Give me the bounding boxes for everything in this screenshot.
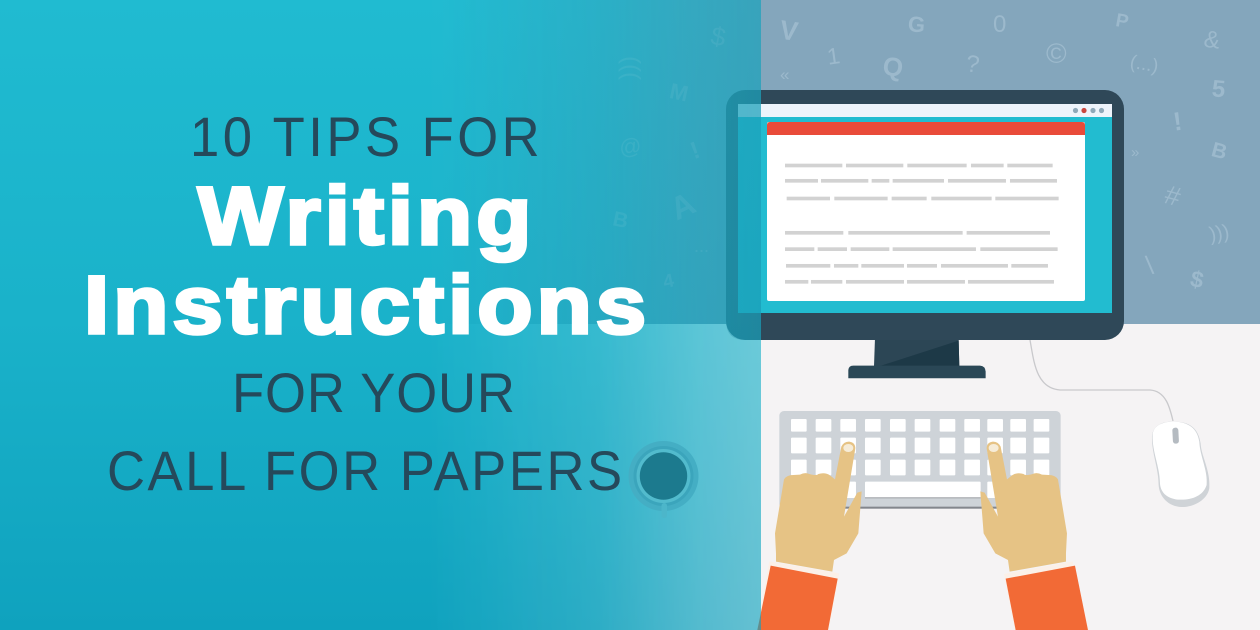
scattered characters on the wall: © bbox=[1046, 38, 1067, 69]
scattered characters on the wall bbox=[778, 10, 1231, 293]
left hand bbox=[775, 442, 862, 572]
scattered characters on the wall: « bbox=[780, 65, 789, 84]
right sleeve bbox=[1004, 561, 1089, 630]
faint characters on teal panel: M bbox=[668, 78, 691, 106]
scattered characters on the wall: \ bbox=[1144, 250, 1156, 280]
title line: for your: FOR YOUR bbox=[232, 362, 515, 424]
left sleeve bbox=[757, 561, 839, 630]
background: desk bbox=[0, 324, 1260, 630]
scattered characters on the wall: (...) bbox=[1128, 52, 1160, 77]
window title bar bbox=[738, 104, 1112, 117]
cup handle bbox=[662, 503, 667, 518]
scattered characters on the wall: » bbox=[1131, 144, 1139, 161]
scattered characters on the wall: V bbox=[778, 15, 800, 47]
title line: call for papers: CALL FOR PAPERS bbox=[107, 440, 622, 502]
screen bbox=[738, 104, 1112, 313]
scattered characters on the wall: $ bbox=[1188, 265, 1206, 293]
scattered characters on the wall: ? bbox=[964, 50, 981, 79]
document page bbox=[767, 122, 1085, 301]
mouse bbox=[1152, 422, 1209, 507]
darker tint on the upper teal panel bbox=[440, 0, 761, 340]
mouse cable bbox=[1030, 340, 1173, 421]
teal overlay panel bbox=[0, 0, 761, 630]
coffee cup bbox=[628, 441, 698, 518]
document text lines bbox=[785, 164, 1059, 284]
faint characters on teal panel bbox=[611, 20, 729, 293]
scattered characters on the wall: 5 bbox=[1211, 75, 1226, 103]
cup rim bbox=[636, 449, 690, 503]
scattered characters on the wall: G bbox=[907, 11, 926, 38]
scattered characters on the wall: P bbox=[1114, 10, 1130, 33]
scattered characters on the wall: B bbox=[1209, 138, 1230, 164]
faint characters on teal panel: B bbox=[611, 208, 630, 233]
scattered characters on the wall: ))) bbox=[1208, 221, 1231, 246]
faint characters on teal panel: ... bbox=[694, 236, 709, 256]
keyboard bbox=[779, 411, 1061, 509]
scattered characters on the wall: & bbox=[1202, 26, 1222, 55]
faint characters on teal panel: 4 bbox=[661, 270, 676, 293]
faint characters on teal panel: A bbox=[665, 185, 701, 227]
monitor stand bbox=[848, 338, 986, 378]
background: wall bbox=[0, 0, 1260, 324]
scattered characters on the wall: ! bbox=[1171, 106, 1184, 137]
faint characters on teal panel: ))) bbox=[615, 56, 642, 80]
saucer bbox=[628, 441, 698, 511]
title line: Instructions: Instructions bbox=[84, 260, 646, 351]
scattered characters on the wall: # bbox=[1162, 179, 1184, 212]
faint characters on teal panel: ! bbox=[687, 137, 704, 165]
document red header bbox=[767, 122, 1085, 135]
coffee bbox=[640, 452, 687, 500]
scattered characters on the wall: 0 bbox=[993, 11, 1006, 38]
right hand bbox=[980, 442, 1067, 572]
title bbox=[84, 106, 646, 502]
title line: Writing: Writing bbox=[198, 171, 531, 262]
scattered characters on the wall: 1 bbox=[825, 42, 842, 70]
title line: 10 tips for: 10 TIPS FOR bbox=[190, 106, 540, 168]
window control dots bbox=[1073, 108, 1104, 113]
monitor bbox=[726, 90, 1124, 378]
faint characters on teal panel: $ bbox=[709, 20, 729, 52]
monitor frame bbox=[726, 90, 1124, 340]
faint characters on teal panel: @ bbox=[617, 133, 643, 160]
scattered characters on the wall: Q bbox=[881, 50, 905, 83]
